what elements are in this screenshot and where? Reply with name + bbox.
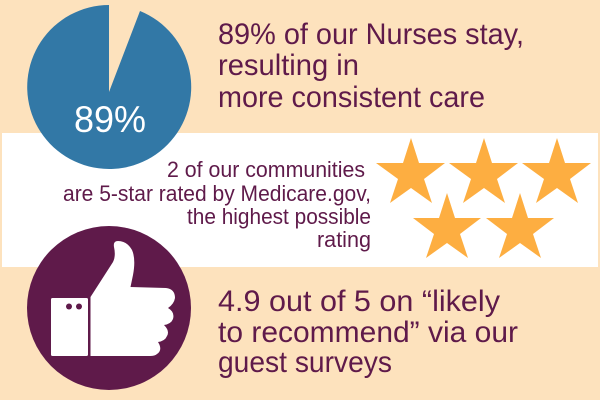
text block: Medicare rating: the highest possible	[187, 204, 371, 229]
text block: guest surveys: guest surveys	[218, 346, 392, 379]
icon: five stars	[376, 138, 591, 258]
text block: Medicare rating	[63, 157, 371, 252]
pie chart: 89 percent	[27, 5, 191, 169]
icon: thumbs up	[27, 226, 191, 390]
pie label: 89%	[74, 99, 146, 140]
text block: nurses: resulting in	[218, 49, 359, 82]
text block: Medicare rating: rating	[317, 227, 371, 252]
text block: guest surveys: 4.9 out of 5 on “likely	[218, 285, 500, 318]
panel: white ratings band	[2, 133, 598, 267]
text block: Medicare rating: 2 of our communities	[167, 157, 365, 182]
text block: guest surveys: to recommend” via our	[218, 316, 518, 349]
text block: guest surveys	[218, 285, 518, 379]
text block: nurses: more consistent care	[218, 81, 485, 114]
text block: Medicare rating: are 5-star rated by Medicare.gov,	[63, 181, 371, 206]
text block: nurses: 89% of our Nurses stay,	[218, 18, 524, 51]
text block: nurses	[218, 18, 524, 114]
